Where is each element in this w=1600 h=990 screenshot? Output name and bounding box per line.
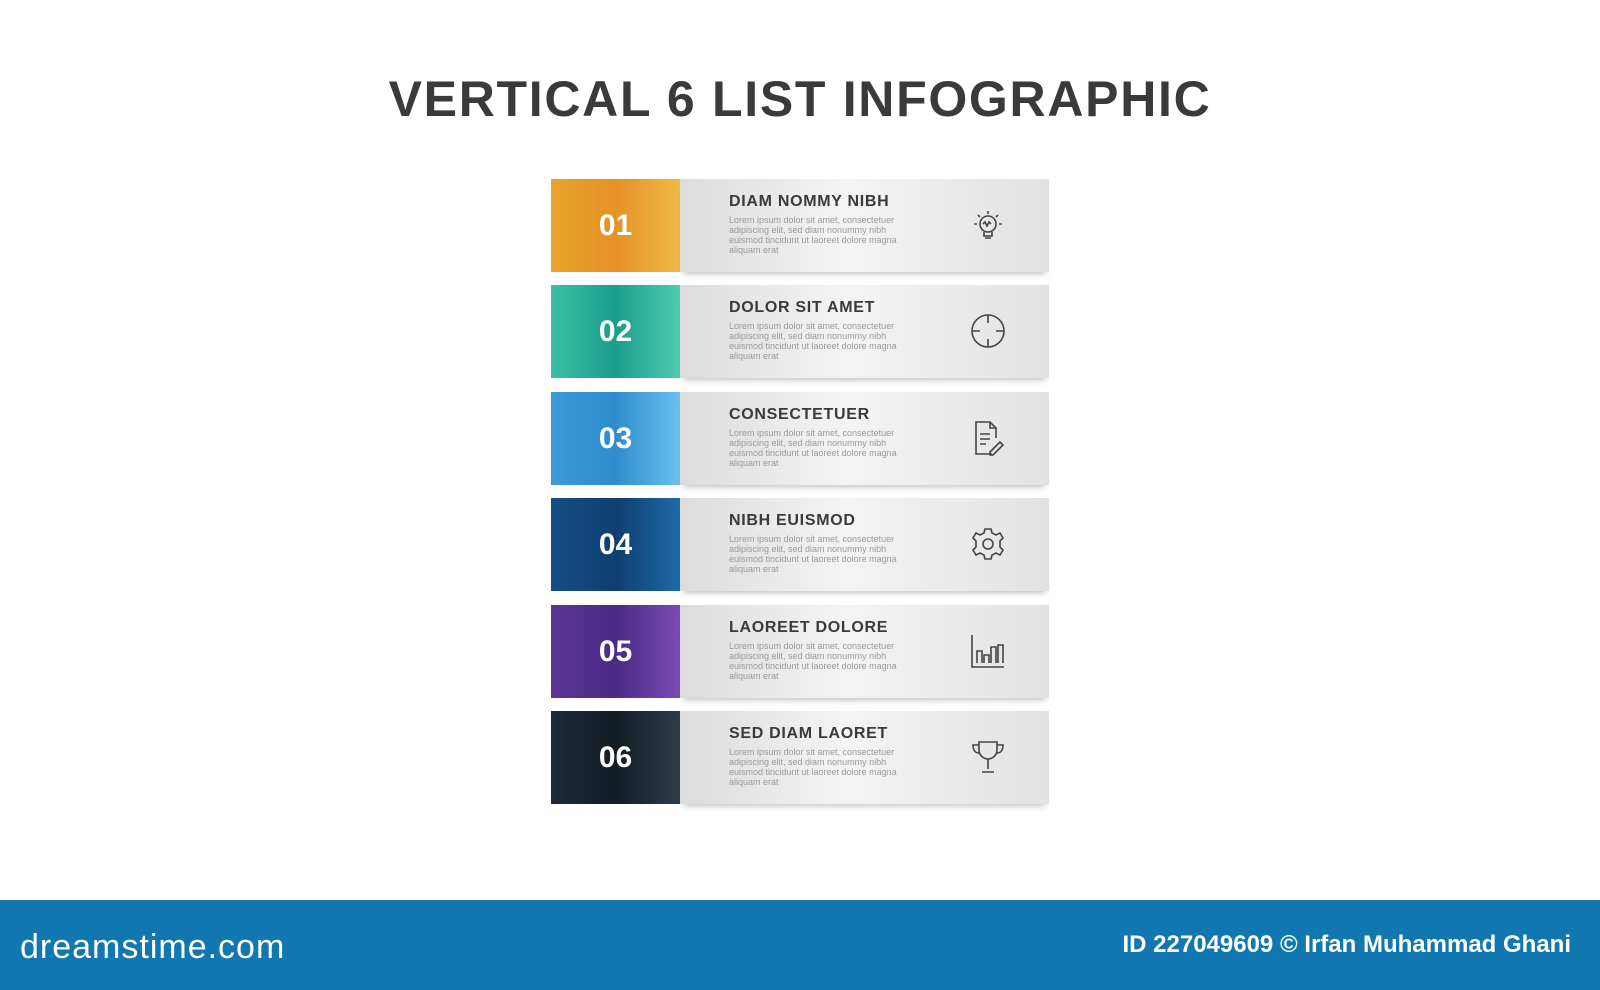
row 01: Lorem ipsum dolor sit amet, consectetuer adipiscing elit, sed diam nonummy nibh euismod tincidunt ut laoreet dolore magna aliquam erat xyxy=(729,215,897,255)
icon: bulb xyxy=(974,211,1002,239)
row 02: 02 xyxy=(599,315,632,348)
row 04: 04 xyxy=(599,528,632,561)
row 01 xyxy=(551,179,1049,278)
footer xyxy=(0,900,1600,990)
title: VERTICAL 6 LIST INFOGRAPHIC xyxy=(389,71,1211,127)
row 02: DOLOR SIT AMET xyxy=(729,299,875,316)
row 05: 05 xyxy=(599,635,632,668)
footer logo: dreamstime.com xyxy=(20,928,285,966)
row 03: Lorem ipsum dolor sit amet, consectetuer adipiscing elit, sed diam nonummy nibh euismod tincidunt ut laoreet dolore magna aliquam erat xyxy=(729,428,897,468)
icon: target xyxy=(971,314,1005,348)
row 05: LAOREET DOLORE xyxy=(729,619,888,636)
row 04: Lorem ipsum dolor sit amet, consectetuer adipiscing elit, sed diam nonummy nibh euismod tincidunt ut laoreet dolore magna aliquam erat xyxy=(729,534,897,574)
row 01: 01 xyxy=(599,209,632,242)
row 03: 03 xyxy=(599,422,632,455)
icon: gear xyxy=(972,528,1004,560)
footer credit: ID 227049609 © Irfan Muhammad Ghani xyxy=(1122,931,1571,958)
row 02 xyxy=(551,285,1049,384)
row 04 xyxy=(551,498,1049,596)
row 01: DIAM NOMMY NIBH xyxy=(729,193,889,210)
icon: trophy xyxy=(972,741,1004,773)
row 06: SED DIAM LAORET xyxy=(729,725,888,742)
row 04: NIBH EUISMOD xyxy=(729,512,856,529)
icon: bar chart xyxy=(971,635,1004,668)
row 02: Lorem ipsum dolor sit amet, consectetuer adipiscing elit, sed diam nonummy nibh euismod tincidunt ut laoreet dolore magna aliquam erat xyxy=(729,321,897,361)
icon: document xyxy=(975,421,1004,456)
row 03 xyxy=(551,392,1049,490)
row 03: CONSECTETUER xyxy=(729,406,870,423)
row 06: Lorem ipsum dolor sit amet, consectetuer adipiscing elit, sed diam nonummy nibh euismod tincidunt ut laoreet dolore magna aliquam erat xyxy=(729,747,897,787)
row 05 xyxy=(551,605,1049,704)
row 05: Lorem ipsum dolor sit amet, consectetuer adipiscing elit, sed diam nonummy nibh euismod tincidunt ut laoreet dolore magna aliquam erat xyxy=(729,641,897,681)
row 06 xyxy=(551,711,1049,810)
row 06: 06 xyxy=(599,741,632,774)
